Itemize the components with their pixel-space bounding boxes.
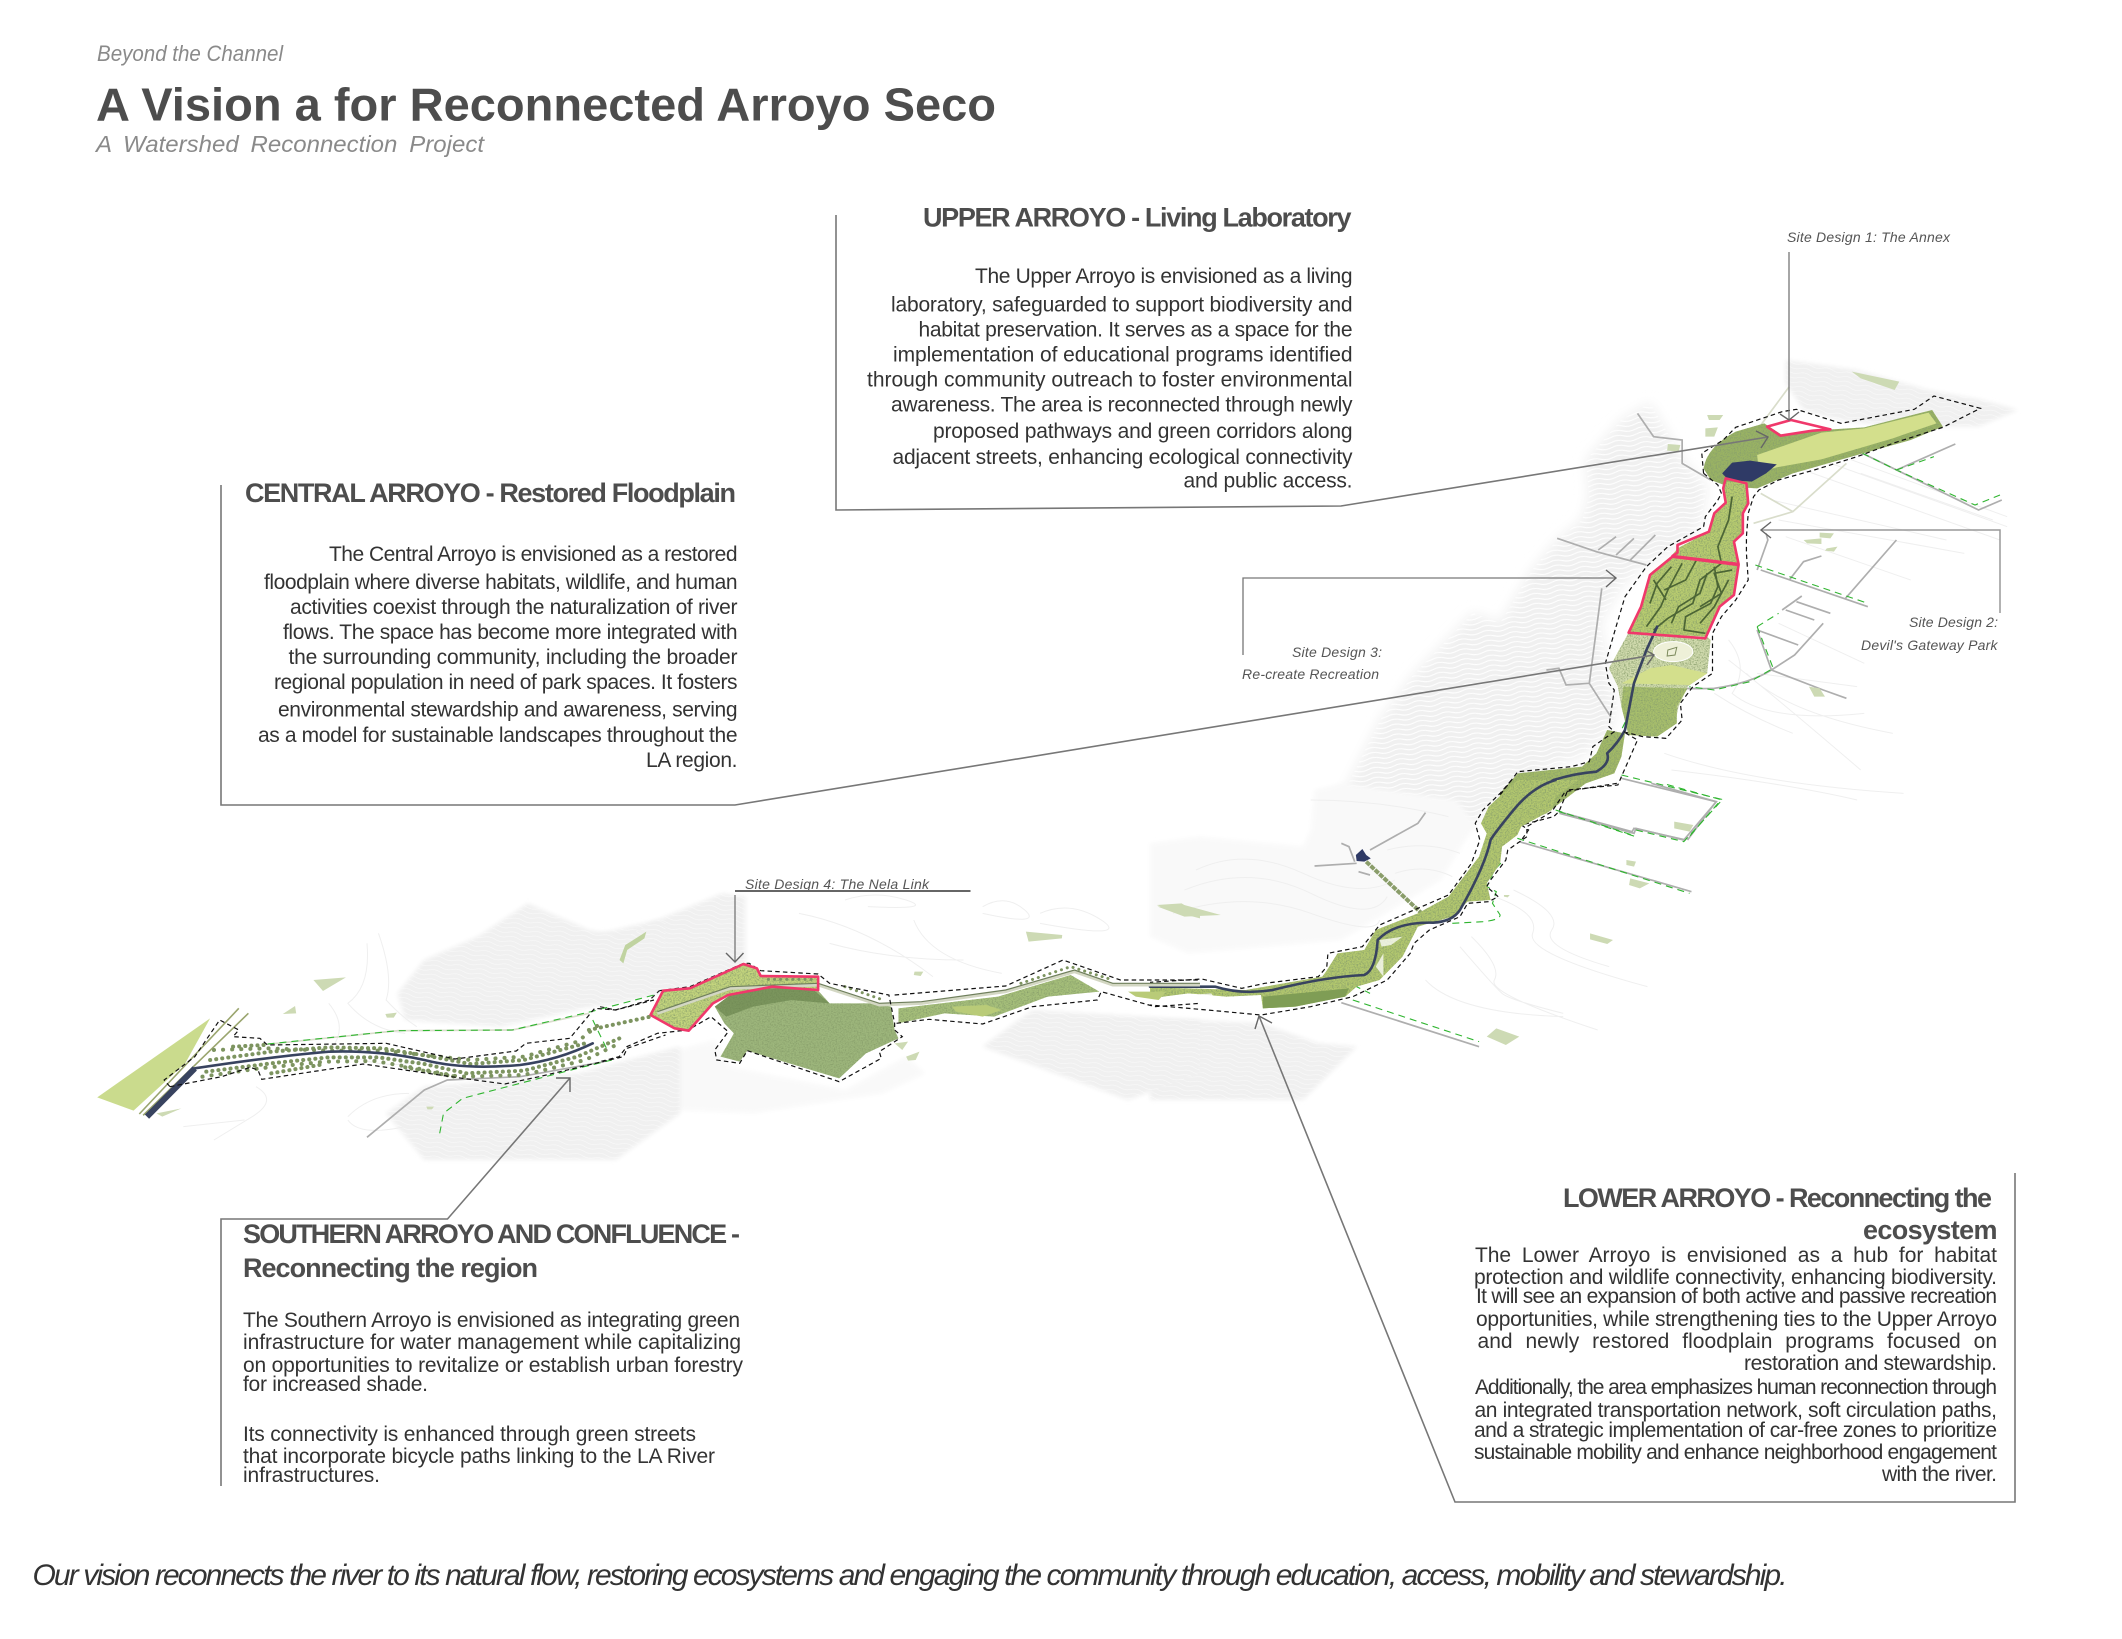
text block: southern arroyo description: infrastructure for water management while capitalizing: [243, 1331, 741, 1354]
map segment: upper arroyo: [1500, 360, 2018, 840]
label: site design 3: Site Design 3:: [1292, 644, 1382, 660]
site boundary: The Annex: [1767, 420, 1830, 436]
map: Arroyo Seco watershed corridor: [97, 360, 2018, 1160]
map segment: nela link and forest: [600, 893, 1200, 1113]
callout leader: central arroyo: [221, 485, 1654, 805]
site boundary: Devil's Gateway Park: [1672, 478, 1748, 564]
label: site design 2: Devil's Gateway Park: [1861, 637, 1998, 653]
text block: upper arroyo description: through community outreach to foster environmental: [867, 368, 1352, 392]
title: A Vision a for Reconnected Arroyo Seco: [96, 78, 996, 130]
callout leader: lower arroyo: [1255, 1016, 2015, 1502]
panel: central arroyo: [221, 478, 1654, 805]
text block: lower arroyo description: protection and wildlife connectivity, enhancing biodiversity.: [1474, 1266, 1997, 1289]
text block: southern arroyo description: Its connectivity is enhanced through green streets: [243, 1423, 696, 1446]
text block: central arroyo description: environmental stewardship and awareness, serving: [278, 698, 738, 722]
heading: central arroyo: CENTRAL ARROYO - Restored Floodplain: [245, 478, 736, 508]
text block: southern arroyo description: [243, 1309, 744, 1487]
text block: central arroyo description: the surrounding community, including the broader: [288, 646, 738, 669]
closing statement: Our vision reconnects the river to its natural flow, restoring ecosystems and engaging the community through education, access, mobility and stewardship.: [32, 1559, 1787, 1592]
label: site design 4: [726, 876, 970, 962]
text block: central arroyo description: [258, 543, 738, 772]
map segment: lower arroyo: [1150, 780, 1722, 1100]
label: site design 2: [1761, 522, 2000, 653]
text block: southern arroyo description: The Southern Arroyo is envisioned as integrating green: [243, 1309, 740, 1332]
heading: lower arroyo: ecosystem: [1863, 1215, 1998, 1245]
text block: southern arroyo description: that incorporate bicycle paths linking to the LA River: [243, 1445, 715, 1468]
text block: upper arroyo description: and public access.: [1184, 470, 1352, 492]
site boundary: Re-create Recreation: [1629, 557, 1739, 638]
subtitle: A Watershed Reconnection Project: [94, 131, 486, 157]
text block: upper arroyo description: The Upper Arroyo is envisioned as a living: [975, 265, 1352, 288]
text block: upper arroyo description: proposed pathways and green corridors along: [933, 420, 1352, 443]
text block: central arroyo description: The Central Arroyo is envisioned as a restored: [329, 543, 738, 566]
heading: upper arroyo: UPPER ARROYO - Living Laboratory: [923, 202, 1352, 232]
heading: southern arroyo: [243, 1219, 740, 1283]
text block: lower arroyo description: [1474, 1244, 1997, 1486]
callout leader: upper arroyo: [836, 215, 1768, 510]
site boundary: The Nela Link: [651, 964, 818, 1031]
label: site design 2: Site Design 2:: [1909, 614, 1998, 630]
text block: lower arroyo description: with the river.: [1881, 1463, 1997, 1486]
text block: lower arroyo description: and a strategic implementation of car-free zones to prioritize: [1474, 1419, 1997, 1442]
heading: lower arroyo: LOWER ARROYO - Reconnecting the: [1563, 1183, 1992, 1213]
text block: lower arroyo description: The Lower Arroyo is envisioned as a hub for habitat: [1475, 1244, 1997, 1267]
text block: central arroyo description: regional population in need of park spaces. It fosters: [274, 671, 738, 694]
panel: upper arroyo: [836, 202, 1768, 510]
text block: lower arroyo description: restoration and stewardship.: [1744, 1352, 1997, 1375]
heading: lower arroyo: [1563, 1183, 1998, 1245]
text block: southern arroyo description: for increased shade.: [243, 1373, 428, 1396]
text block: upper arroyo description: implementation of educational programs identified: [893, 344, 1352, 366]
label: site design 1: [1780, 229, 1951, 420]
map segment: southern arroyo and confluence: [97, 903, 680, 1160]
text block: upper arroyo description: adjacent streets, enhancing ecological connectivity: [892, 446, 1353, 469]
label: site design 1: Site Design 1: The Annex: [1787, 229, 1951, 245]
panel: southern arroyo and confluence: [221, 1078, 744, 1487]
text block: lower arroyo description: and newly restored floodplain programs focused on: [1478, 1330, 1997, 1353]
text block: upper arroyo description: habitat preservation. It serves as a space for the: [918, 318, 1352, 342]
text block: central arroyo description: floodplain where diverse habitats, wildlife, and human: [264, 571, 738, 594]
callout leader: southern arroyo: [221, 1078, 570, 1486]
text block: upper arroyo description: [867, 265, 1353, 492]
text block: lower arroyo description: opportunities, while strengthening ties to the Upper Arroyo: [1476, 1308, 1997, 1331]
text block: central arroyo description: as a model for sustainable landscapes throughout the: [258, 724, 738, 747]
text block: southern arroyo description: infrastructures.: [243, 1464, 380, 1487]
text block: upper arroyo description: laboratory, safeguarded to support biodiversity and: [891, 294, 1352, 316]
text block: southern arroyo description: on opportunities to revitalize or establish urban forestry: [243, 1354, 744, 1377]
heading: southern arroyo: Reconnecting the region: [243, 1253, 538, 1283]
label: site design 3: [1242, 570, 1616, 682]
panel: lower arroyo: [1255, 1016, 2015, 1502]
text block: lower arroyo description: Additionally, the area emphasizes human reconnection through: [1475, 1376, 1997, 1399]
text block: upper arroyo description: awareness. The area is reconnected through newly: [891, 394, 1353, 416]
label: site design 4: Site Design 4: The Nela Link: [745, 876, 930, 892]
map segment: north-west terrain: [1340, 403, 1707, 850]
text block: lower arroyo description: an integrated transportation network, soft circulation paths,: [1474, 1399, 1997, 1422]
text block: central arroyo description: flows. The space has become more integrated with: [283, 621, 738, 644]
header: kicker line: Beyond the Channel: [97, 41, 284, 66]
text block: central arroyo description: LA region.: [646, 749, 738, 772]
text block: central arroyo description: activities coexist through the naturalization of river: [290, 596, 738, 619]
text block: lower arroyo description: sustainable mobility and enhance neighborhood engagement: [1474, 1441, 1997, 1464]
label: site design 3: Re-create Recreation: [1242, 666, 1379, 682]
heading: southern arroyo: SOUTHERN ARROYO AND CONFLUENCE -: [243, 1219, 740, 1249]
text block: lower arroyo description: It will see an expansion of both active and passive recreation: [1476, 1285, 1997, 1308]
